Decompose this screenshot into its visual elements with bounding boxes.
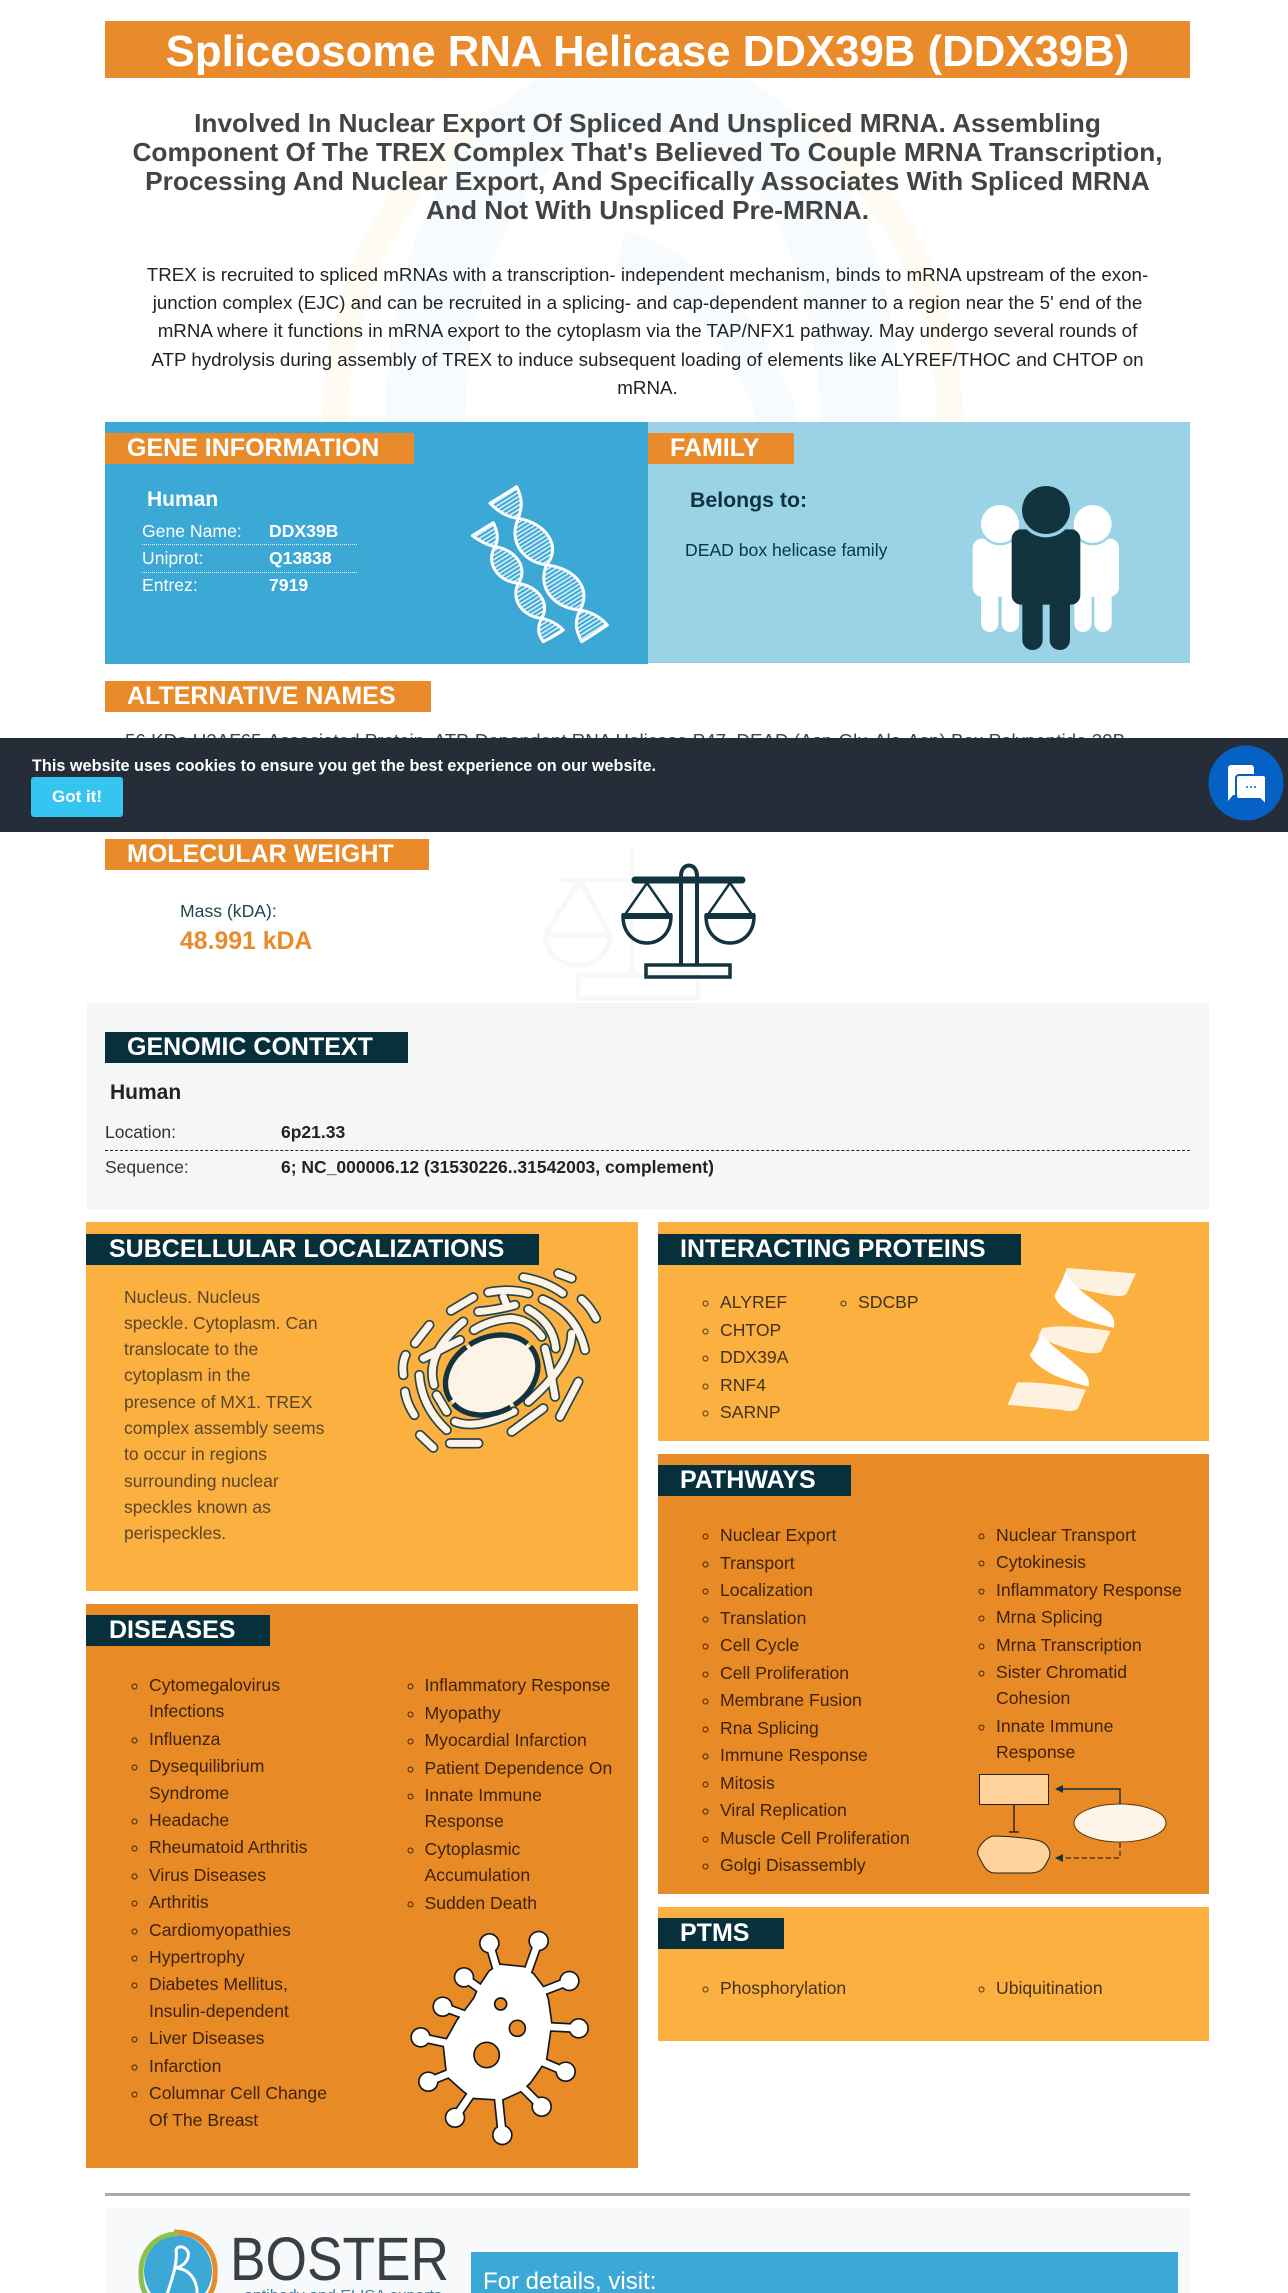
mass label: Mass (kDA): bbox=[180, 901, 277, 921]
pathways list column 1: Immune Response bbox=[720, 1745, 868, 1765]
pathways list column 2: Response bbox=[996, 1742, 1075, 1762]
diseases list column 2: Myocardial Infarction bbox=[424, 1730, 587, 1750]
interacting proteins list column 1: DDX39A bbox=[720, 1347, 788, 1367]
PTMs list column 1: Phosphorylation bbox=[720, 1978, 846, 1998]
subcellular text: to occur in regions bbox=[124, 1444, 267, 1464]
subcellular text bbox=[124, 1286, 324, 1543]
gene table: DDX39B bbox=[269, 521, 338, 541]
heading: PTMs bbox=[658, 1918, 784, 1949]
gene table: Q13838 bbox=[269, 548, 332, 568]
subcellular text: cytoplasm in the bbox=[124, 1365, 250, 1385]
heading: genomic context: GENOMIC CONTEXT bbox=[127, 1033, 373, 1061]
pathways list column 2 bbox=[978, 1525, 1182, 1762]
logo: Boster: BOSTER bbox=[230, 2225, 449, 2293]
diseases list column 1: Syndrome bbox=[149, 1783, 229, 1803]
icon: pathway diagram bbox=[977, 1774, 1166, 1874]
heading: diseases: DISEASES bbox=[109, 1616, 235, 1644]
pathways list column 2: Mrna Transcription bbox=[996, 1635, 1142, 1655]
interacting proteins list column 2: SDCBP bbox=[858, 1292, 919, 1312]
icon: balance scale bbox=[621, 864, 756, 979]
interacting proteins list column 1 bbox=[702, 1292, 788, 1422]
cookie message: This website uses cookies to ensure you get the best experience on our website. bbox=[32, 757, 656, 775]
subcellular text: speckle. Cytoplasm. Can bbox=[124, 1313, 318, 1333]
subcellular text: presence of MX1. TREX bbox=[124, 1392, 312, 1412]
pathways list column 2: Sister Chromatid bbox=[996, 1662, 1127, 1682]
pathways list column 2: Mrna Splicing bbox=[996, 1607, 1103, 1627]
faint scale watermark bbox=[540, 845, 720, 1003]
genomic location row: 6p21.33 bbox=[281, 1122, 345, 1142]
icon: DNA double helix bbox=[470, 485, 609, 644]
diseases list column 2: Inflammatory Response bbox=[424, 1675, 610, 1695]
pathways list column 1: Translation bbox=[720, 1608, 806, 1628]
diseases list column 1 bbox=[132, 1675, 327, 2130]
subcellular text: Nucleus. Nucleus bbox=[124, 1286, 260, 1306]
background watermark logo bbox=[322, 100, 963, 422]
PTMs list column 2: Ubiquitination bbox=[996, 1978, 1103, 1998]
gene species label: Human bbox=[147, 488, 218, 511]
pathways list column 1: Nuclear Export bbox=[720, 1525, 836, 1545]
diseases list column 2: Innate Immune bbox=[424, 1785, 542, 1805]
panel: PTMs bbox=[658, 1907, 1209, 2041]
gene table: 7919 bbox=[269, 575, 308, 595]
icon: group of people bbox=[972, 486, 1119, 650]
subtitle: Component Of The TREX Complex That's Believed To Couple MRNA Transcription, bbox=[132, 136, 1163, 166]
pathways list column 2: Nuclear Transport bbox=[996, 1525, 1136, 1545]
pathways list column 1: Cell Cycle bbox=[720, 1635, 799, 1655]
interacting proteins list column 1: RNF4 bbox=[720, 1374, 766, 1394]
pathways list column 1: Rna Splicing bbox=[720, 1718, 819, 1738]
diseases list column 1: Infections bbox=[149, 1701, 224, 1721]
subcellular text: perispeckles. bbox=[124, 1523, 226, 1543]
genomic location row bbox=[105, 1122, 345, 1142]
diseases list column 2: Accumulation bbox=[424, 1865, 530, 1885]
subcellular text: complex assembly seems bbox=[124, 1418, 324, 1438]
description paragraph: ATP hydrolysis during assembly of TREX to induce subsequent loading of elements like ALYREF/THOC and CHTOP on bbox=[151, 349, 1144, 370]
heading: PTMs: PTMS bbox=[680, 1919, 749, 1947]
subtitle: Processing And Nuclear Export, And Specifically Associates With Spliced MRNA bbox=[145, 166, 1150, 196]
heading: pathways: PATHWAYS bbox=[680, 1466, 816, 1494]
panel: pathways bbox=[658, 1454, 1209, 1894]
pathways list column 1: Muscle Cell Proliferation bbox=[720, 1828, 910, 1848]
diseases list column 1: Liver Diseases bbox=[149, 2028, 264, 2048]
gene table: Gene Name: bbox=[142, 521, 242, 541]
pathways list column 1 bbox=[702, 1525, 910, 1875]
subtitle: And Not With Unspliced Pre-MRNA. bbox=[426, 194, 869, 224]
title banner: Spliceosome RNA Helicase DDX39B (DDX39B) bbox=[166, 27, 1129, 76]
panel: family bbox=[648, 422, 1190, 663]
cookie banner bbox=[0, 738, 1288, 832]
pathways list column 1: Mitosis bbox=[720, 1772, 775, 1792]
heading: family bbox=[648, 433, 794, 464]
pathways list column 1: Localization bbox=[720, 1580, 813, 1600]
pathways list column 2: Inflammatory Response bbox=[996, 1580, 1182, 1600]
cookie button: Got it! bbox=[52, 787, 102, 806]
diseases list column 1: Cytomegalovirus bbox=[149, 1675, 280, 1695]
diseases list column 1: Diabetes Mellitus, bbox=[149, 1974, 288, 1994]
genomic species label: Human bbox=[110, 1081, 181, 1104]
description paragraph: mRNA. bbox=[617, 377, 678, 398]
subcellular text: translocate to the bbox=[124, 1339, 258, 1359]
icon: protein ribbon bbox=[1008, 1268, 1136, 1411]
diseases list column 2: Patient Dependence On bbox=[424, 1758, 612, 1778]
diseases list column 1: Dysequilibrium bbox=[149, 1756, 264, 1776]
heading: interacting proteins: INTERACTING PROTEINS bbox=[680, 1235, 986, 1263]
diseases list column 1: Cardiomyopathies bbox=[149, 1920, 291, 1940]
icon: chat widget bbox=[1208, 746, 1284, 820]
description paragraph bbox=[147, 264, 1148, 398]
pathways list column 1: Transport bbox=[720, 1552, 795, 1572]
heading: alternative names: ALTERNATIVE NAMES bbox=[127, 682, 396, 710]
panel: diseases bbox=[86, 1604, 638, 2168]
diseases list column 1: Infarction bbox=[149, 2056, 221, 2076]
heading: diseases bbox=[86, 1615, 270, 1646]
pathways list column 2: Innate Immune bbox=[996, 1716, 1113, 1736]
diseases list column 2: Response bbox=[424, 1811, 504, 1831]
genomic location row: Location: bbox=[105, 1122, 176, 1142]
panel: footer bbox=[105, 2208, 1190, 2293]
pathways list column 1: Membrane Fusion bbox=[720, 1690, 862, 1710]
pathways list column 2: Cohesion bbox=[996, 1688, 1070, 1708]
heading: subcellular localizations: SUBCELLULAR LOCALIZATIONS bbox=[109, 1235, 504, 1263]
panel: subcellular localizations bbox=[86, 1222, 638, 1591]
pathways list column 1: Viral Replication bbox=[720, 1800, 847, 1820]
subcellular text: surrounding nuclear bbox=[124, 1471, 279, 1491]
diseases list column 2: Sudden Death bbox=[424, 1893, 537, 1913]
family value: DEAD box helicase family bbox=[685, 540, 887, 560]
family label: Belongs to: bbox=[690, 488, 807, 512]
logo: Boster bbox=[138, 2225, 449, 2293]
genomic sequence row: 6; NC_000006.12 (31530226..31542003, complement) bbox=[281, 1157, 714, 1177]
heading: family: FAMILY bbox=[670, 434, 759, 462]
diseases list column 2: Cytoplasmic bbox=[424, 1839, 520, 1859]
interacting proteins list column 1: CHTOP bbox=[720, 1320, 781, 1340]
description paragraph: mRNA where it functions in mRNA export to the cytoplasm via the TAP/NFX1 pathway. May undergo several rounds of bbox=[158, 320, 1137, 341]
diseases list column 1: Hypertrophy bbox=[149, 1947, 245, 1967]
pathways list column 2: Cytokinesis bbox=[996, 1552, 1086, 1572]
description paragraph: TREX is recruited to spliced mRNAs with a transcription- independent mechanism, binds to mRNA upstream of the exon- bbox=[147, 264, 1148, 285]
subcellular text: speckles known as bbox=[124, 1497, 271, 1517]
gene table: Entrez: bbox=[142, 575, 198, 595]
diseases list column 1: Of The Breast bbox=[149, 2110, 258, 2130]
description paragraph: junction complex (EJC) and can be recruited in a splicing- and cap-dependent manner to a region near the 5' end of the bbox=[153, 292, 1142, 313]
interacting proteins list column 1: ALYREF bbox=[720, 1292, 787, 1312]
heading: molecular weight: MOLECULAR WEIGHT bbox=[127, 840, 394, 868]
heading: gene information: GENE INFORMATION bbox=[127, 434, 379, 462]
subtitle bbox=[132, 108, 1163, 224]
interacting proteins list column 1: SARNP bbox=[720, 1402, 781, 1422]
diseases list column 2 bbox=[408, 1675, 612, 1913]
subtitle: Involved In Nuclear Export Of Spliced And Unspliced MRNA. Assembling bbox=[194, 108, 1101, 138]
callout: details box bbox=[471, 2252, 1178, 2293]
diseases list column 1: Insulin-dependent bbox=[149, 2001, 289, 2021]
gene table: Uniprot: bbox=[142, 548, 204, 568]
alternative names text: 56 KDa U2AF65-Associated Protein, ATP-Dependent RNA Helicase P47, DEAD (Asp-Glu-Ala-Asp) Box Polypeptide 39B, bbox=[125, 730, 1130, 751]
panel: genomic context bbox=[87, 1003, 1209, 1209]
panel: interacting proteins bbox=[658, 1222, 1209, 1441]
icon: virus bbox=[410, 1930, 589, 2146]
diseases list column 2: Myopathy bbox=[424, 1702, 501, 1722]
pathways list column 1: Cell Proliferation bbox=[720, 1662, 849, 1682]
diseases list column 1: Columnar Cell Change bbox=[149, 2083, 327, 2103]
mass value: 48.991 kDA bbox=[180, 928, 312, 955]
diseases list column 1: Arthritis bbox=[149, 1892, 209, 1912]
pathways list column 1: Golgi Disassembly bbox=[720, 1855, 866, 1875]
icon: cell with organelles bbox=[398, 1268, 602, 1453]
diseases list column 1: Headache bbox=[149, 1810, 229, 1830]
gene table bbox=[142, 521, 357, 595]
cookie button bbox=[31, 777, 123, 817]
genomic sequence row: Sequence: bbox=[105, 1157, 189, 1177]
panel: gene information bbox=[105, 422, 648, 664]
diseases list column 1: Influenza bbox=[149, 1729, 220, 1749]
diseases list column 1: Rheumatoid Arthritis bbox=[149, 1837, 307, 1857]
heading: pathways bbox=[658, 1465, 851, 1496]
diseases list column 1: Virus Diseases bbox=[149, 1865, 266, 1885]
